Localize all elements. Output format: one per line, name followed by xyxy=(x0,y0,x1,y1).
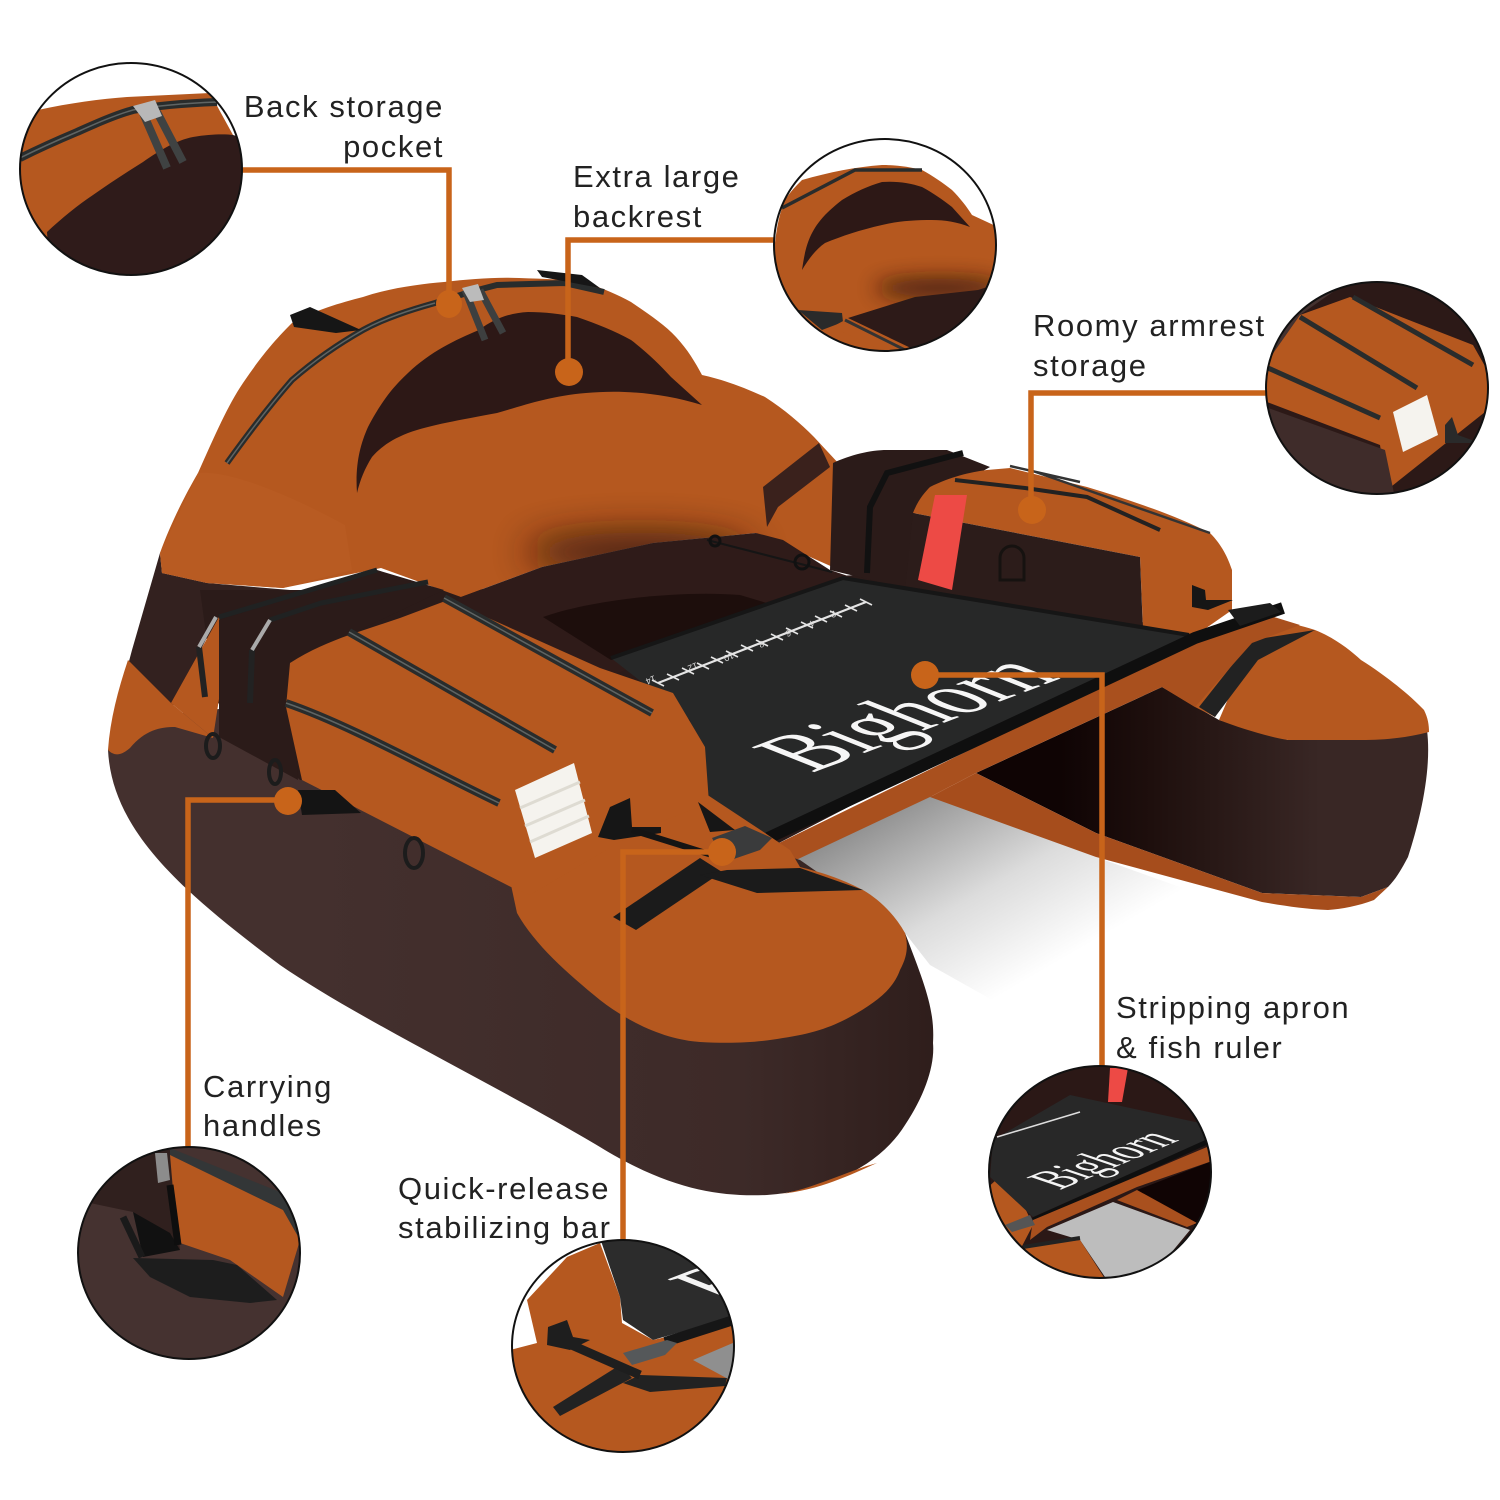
backrest shadow xyxy=(525,532,755,572)
callout: roomy armrest storage xyxy=(1033,278,1492,498)
left pontoon xyxy=(108,553,933,1195)
mesh window xyxy=(357,312,702,493)
callout: carrying handles xyxy=(75,1069,333,1364)
backrest xyxy=(160,270,840,597)
label: Carrying xyxy=(203,1069,333,1104)
inset circle xyxy=(775,165,995,350)
inset circle xyxy=(985,1062,1217,1282)
inset circle: B xyxy=(644,1252,800,1314)
callout: roomy armrest storage: storage xyxy=(1033,348,1148,383)
zipper pulls xyxy=(465,290,503,340)
callout: stripping apron: & fish ruler xyxy=(1116,1030,1283,1065)
fish ruler: 6 xyxy=(784,628,792,639)
d-rings xyxy=(206,734,220,758)
side strap patch xyxy=(763,443,830,527)
callout: extra large backrest xyxy=(573,135,1005,355)
callout: back storage pocket xyxy=(15,60,444,280)
inset circle xyxy=(513,1241,733,1451)
fish ruler: 14 xyxy=(644,673,657,686)
fish ruler: 10 xyxy=(722,650,735,663)
fish ruler: 4 xyxy=(808,618,816,629)
right pontoon xyxy=(930,620,1429,910)
label: Roomy armrest xyxy=(1033,308,1266,343)
callout: quick-release stabilizing bar: stabilizing bar xyxy=(398,1210,612,1245)
callout: carrying handles: handles xyxy=(203,1108,323,1143)
apron logo: Bighorn xyxy=(728,644,1083,782)
inset circle xyxy=(79,1148,299,1358)
top buckles xyxy=(290,307,361,333)
label: Stripping apron xyxy=(1116,990,1350,1025)
ground shadow xyxy=(790,795,1230,1010)
right armrest pocket xyxy=(830,450,1233,640)
callout: back storage pocket: pocket xyxy=(343,129,444,164)
stripping apron xyxy=(611,578,1283,838)
callout: extra large backrest: backrest xyxy=(573,199,703,234)
inset circle: Bighorn xyxy=(1014,1125,1192,1194)
fish ruler: 12 xyxy=(686,660,699,673)
label: Quick-release xyxy=(398,1171,610,1206)
white tag xyxy=(515,763,592,858)
label: Back storage xyxy=(244,89,444,124)
inset circle xyxy=(21,93,241,274)
float tube illustration xyxy=(108,270,1429,1195)
apron support bar xyxy=(775,612,1300,860)
inset circle xyxy=(1260,278,1492,498)
seat opening xyxy=(440,533,860,680)
front orange tube xyxy=(511,790,907,1043)
carrying handle xyxy=(298,790,361,815)
callout: quick-release stabilizing bar xyxy=(398,1177,735,1453)
stabilizing bar straps xyxy=(598,798,661,840)
fish ruler xyxy=(644,599,872,686)
callout lines xyxy=(188,170,1266,1240)
fish ruler: 8 xyxy=(757,639,765,650)
callout: stripping apron xyxy=(985,990,1350,1282)
dark underlay between parts xyxy=(200,575,1190,845)
label: Extra large xyxy=(573,159,740,194)
fish ruler: 2 xyxy=(829,609,837,620)
left armrest pocket xyxy=(171,570,863,930)
